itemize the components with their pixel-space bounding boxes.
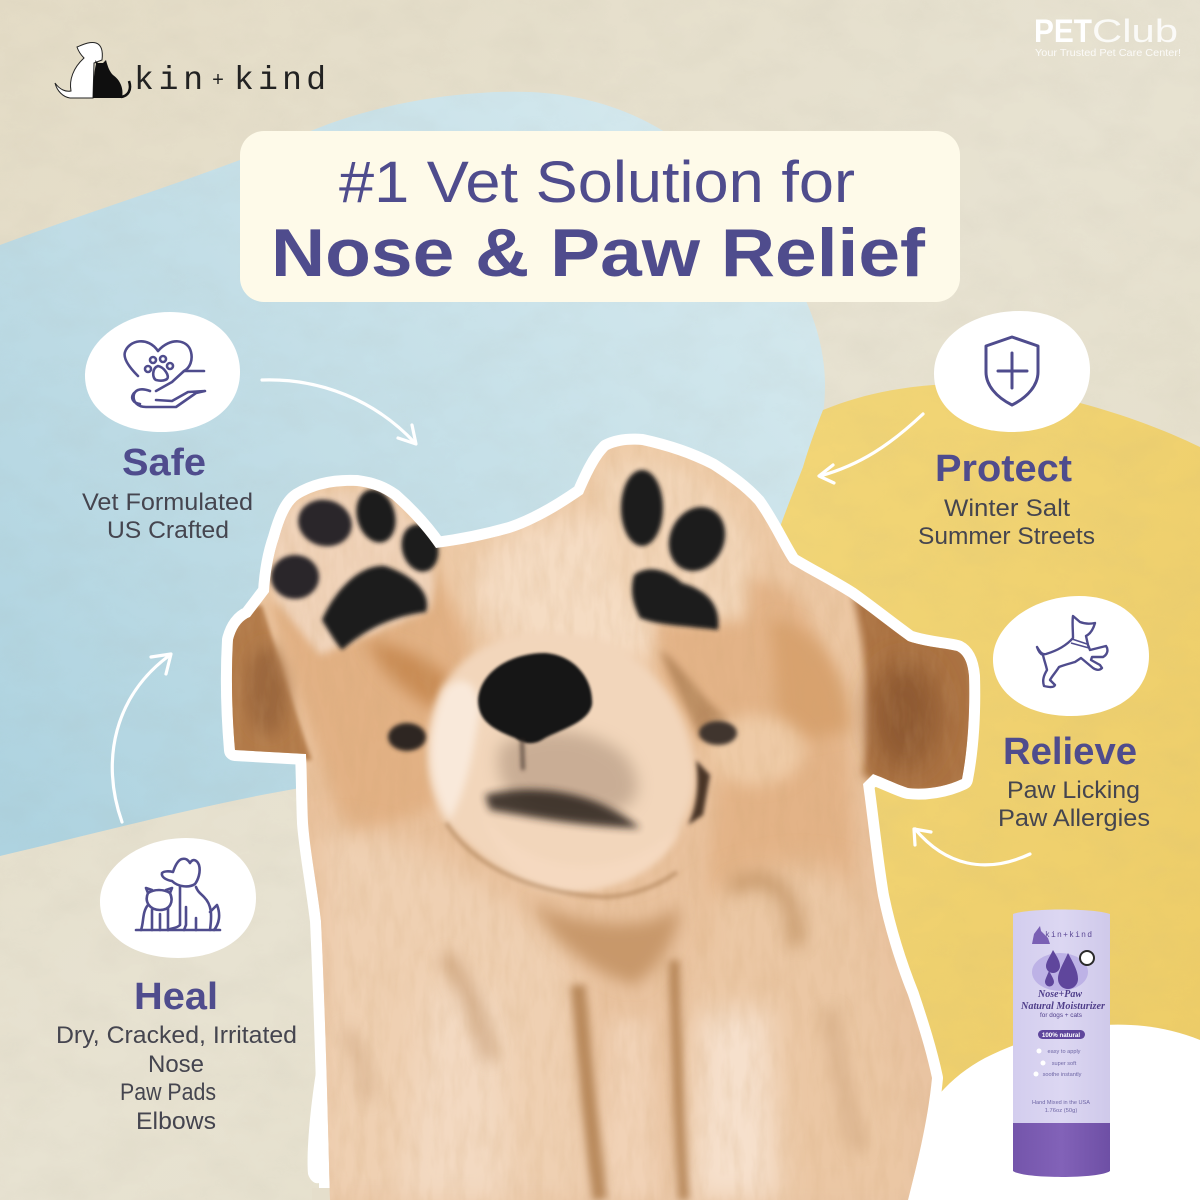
white blob behind product (900, 1025, 1200, 1200)
text: heal details: Paw Pads (120, 1079, 216, 1106)
panel: heal (56, 838, 297, 1135)
title line 2: Nose & Paw Relief (271, 215, 925, 291)
text: protect details: Summer Streets (918, 523, 1095, 550)
icon: jumping dog (993, 596, 1149, 716)
text: relieve details: Paw Licking (1007, 777, 1140, 804)
chin crease (446, 823, 677, 897)
left arm (268, 560, 470, 840)
tube blob and drops (1032, 953, 1088, 991)
wordmark (134, 62, 326, 99)
right paw pads (621, 470, 735, 630)
heading: protect: Protect (935, 448, 1072, 490)
heading: relieve: Relieve (1003, 731, 1137, 773)
title line 1: #1 Vet Solution for (339, 150, 855, 215)
icon: dog and cat (55, 42, 130, 98)
arrow: safe to dog (262, 380, 416, 444)
dog photo cut-out (220, 430, 990, 1200)
organic seal (1080, 951, 1094, 965)
yellow paint blob (780, 385, 1200, 1200)
text: safe details (82, 489, 253, 544)
text: heal details: Nose (148, 1051, 204, 1078)
fur texture (262, 458, 913, 1200)
panel: protect (918, 311, 1095, 550)
text: relieve details (998, 777, 1150, 832)
brand logo: kin+kind (55, 42, 326, 99)
text: protect details: Winter Salt (944, 495, 1070, 522)
PETClub watermark: Your Trusted Pet Care Center! (1035, 47, 1181, 59)
bullet sparkles (1034, 1048, 1046, 1076)
PETClub watermark (1034, 13, 1181, 59)
heading: heal: Heal (134, 976, 218, 1018)
eyes (388, 723, 426, 751)
left paw pads (271, 485, 444, 650)
natural badge: 100% natural (1042, 1032, 1080, 1039)
tube text: Hand Mixed in the USA (1032, 1100, 1090, 1106)
tube text (1020, 989, 1106, 1114)
tube text: super soft (1052, 1061, 1077, 1067)
natural badge (1038, 1030, 1085, 1039)
legs (320, 830, 590, 1200)
wordmark: kin (134, 62, 203, 99)
text: relieve details: Paw Allergies (998, 805, 1150, 832)
tube logo: kin+kind (1045, 931, 1092, 940)
text: heal details: Elbows (136, 1108, 216, 1135)
heading: safe: Safe (122, 442, 206, 484)
wordmark: + (212, 70, 224, 93)
tube text: Natural Moisturizer (1020, 1001, 1106, 1012)
icon: cat and dog (100, 838, 256, 958)
tube text: Nose+Paw (1037, 989, 1083, 1000)
text: protect details (918, 495, 1095, 550)
white sticker outline (232, 445, 969, 1200)
panel: relieve (993, 596, 1150, 832)
text: heal details: Dry, Cracked, Irritated (56, 1022, 297, 1049)
PETClub watermark: Club (1092, 13, 1178, 49)
ears (225, 605, 312, 760)
mouth (485, 790, 640, 828)
forehead (464, 508, 659, 664)
fur streaks (578, 985, 600, 1200)
tube text: soothe instantly (1043, 1072, 1082, 1078)
text: safe details: US Crafted (107, 517, 229, 544)
tube text: 1.76oz (50g) (1045, 1108, 1077, 1114)
right arm (646, 576, 857, 897)
tube text: for dogs + cats (1040, 1012, 1082, 1019)
chin shadow (688, 760, 710, 825)
wordmark: kind (234, 62, 326, 99)
icon: shield with plus (934, 311, 1090, 432)
tube text: easy to apply (1048, 1049, 1081, 1055)
muzzle (427, 632, 695, 892)
PETClub watermark: PET (1034, 13, 1092, 49)
text: safe details: Vet Formulated (82, 489, 253, 516)
panel: safe (82, 312, 253, 544)
arrow: relieve to dog (914, 829, 1030, 865)
title panel (240, 131, 960, 302)
icon: heart and paw in hand (85, 312, 240, 432)
product: moisturizer tube (1013, 910, 1110, 1177)
arrow: heal to dog (112, 654, 171, 822)
text: heal details (56, 1022, 297, 1135)
nose (478, 653, 592, 743)
blue paint blob (0, 92, 825, 856)
arrow: protect to dog (819, 414, 923, 483)
